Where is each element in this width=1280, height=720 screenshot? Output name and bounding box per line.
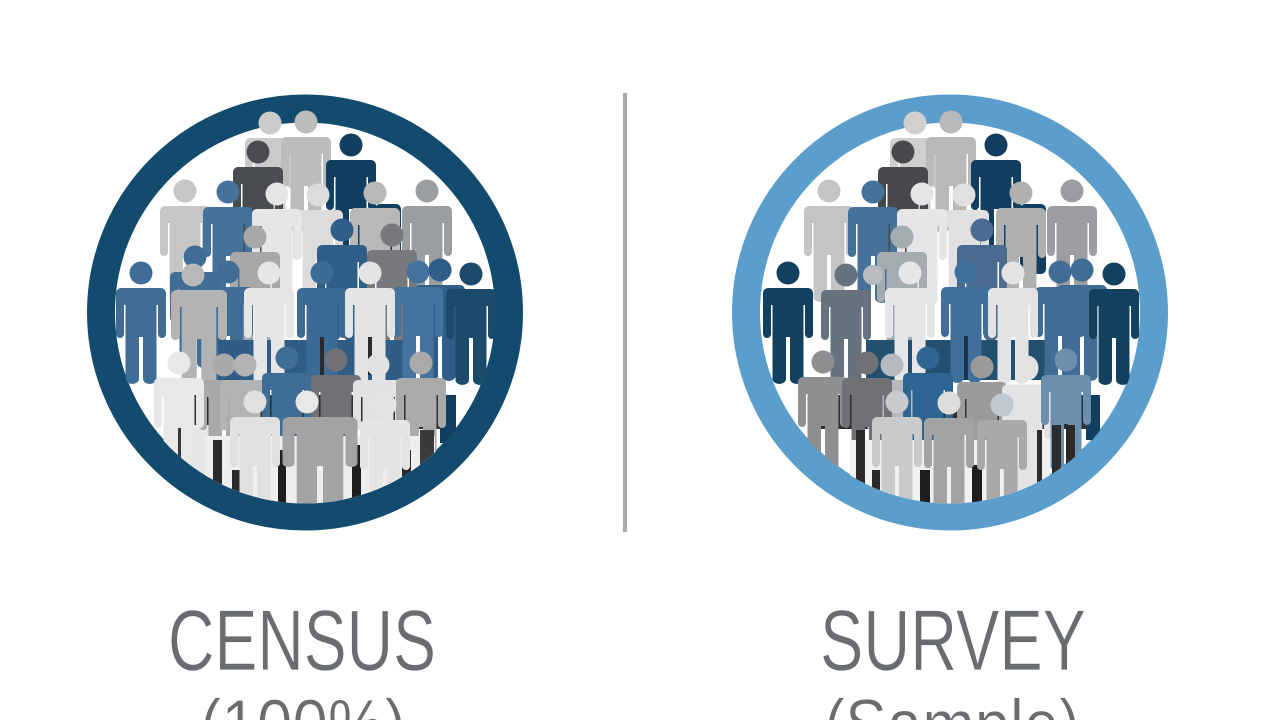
panel: survey circle xyxy=(746,108,1154,516)
survey ring xyxy=(746,108,1154,516)
survey crowd of people icons xyxy=(763,110,1139,516)
heading: survey: SURVEY xyxy=(820,593,1086,689)
census fourth row behind xyxy=(170,246,465,383)
survey third row xyxy=(877,218,1007,348)
census front row xyxy=(230,390,410,516)
panel: census circle xyxy=(101,108,509,516)
census ring xyxy=(101,108,509,516)
survey lower legs band xyxy=(850,412,1075,504)
survey back row xyxy=(878,110,1021,263)
census back row xyxy=(233,110,376,263)
survey second row xyxy=(804,180,1097,306)
heading: census: CENSUS xyxy=(168,593,436,689)
census fifth row xyxy=(154,346,456,477)
survey fifth row xyxy=(798,346,1100,490)
census second row xyxy=(160,180,452,306)
census fourth row xyxy=(116,260,496,386)
census lower legs band xyxy=(205,430,435,510)
survey front row xyxy=(872,390,1027,516)
census crowd of people icons xyxy=(116,110,496,516)
census third row xyxy=(230,218,417,348)
survey fourth row xyxy=(763,260,1139,386)
infographic: census versus survey comparison xyxy=(87,93,1168,720)
divider line xyxy=(623,93,627,532)
survey fourth row behind xyxy=(866,258,1107,381)
